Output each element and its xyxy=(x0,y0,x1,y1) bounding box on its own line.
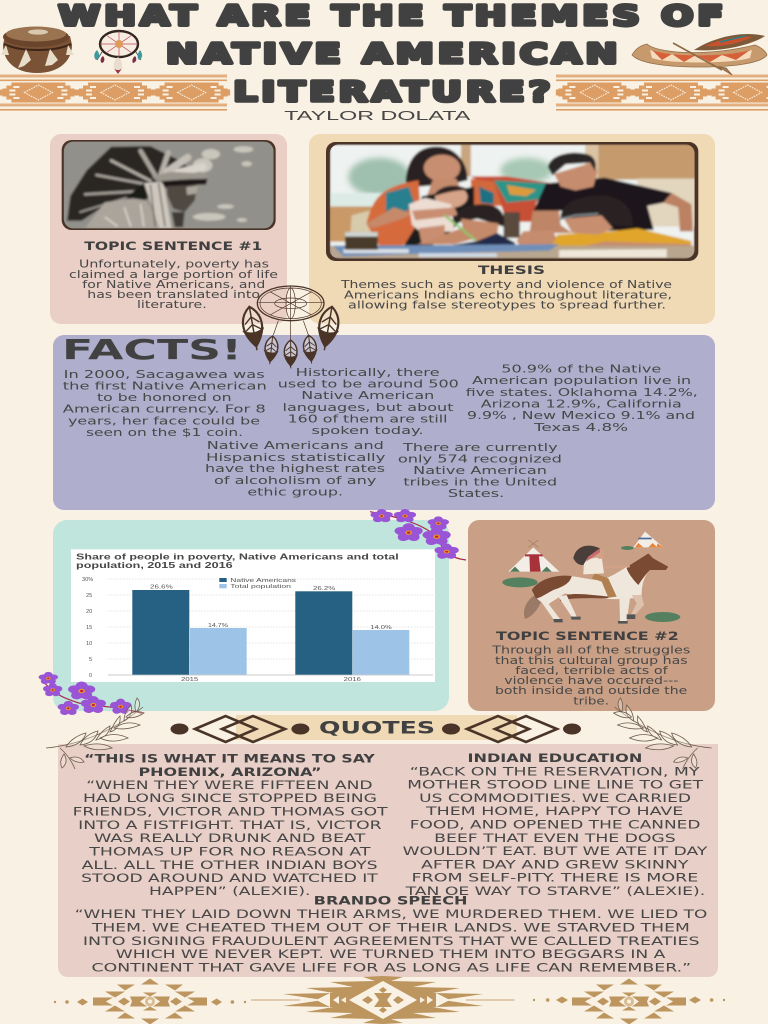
y axis labels: 20 xyxy=(86,609,92,615)
chart title: population, 2015 and 2016 xyxy=(76,560,233,570)
text block: topic sentence 2 xyxy=(491,644,691,708)
fact: Sacagawea xyxy=(63,368,267,439)
x axis labels: 2015 xyxy=(181,677,198,683)
fact: languages: used to be around 500 xyxy=(278,378,459,390)
icon: small dream catcher xyxy=(94,31,142,74)
text block: topic sentence 2: tribe. xyxy=(573,694,609,708)
fact: population by state: five states. Oklahoma 14.2%, xyxy=(466,386,698,399)
fact: alcoholism: have the highest rates xyxy=(205,462,386,475)
text block: thesis: allowing false stereotypes to spread further. xyxy=(348,298,666,312)
fact: Sacagawea: the first Native American xyxy=(63,380,267,392)
value labels: 14.7% xyxy=(208,623,228,629)
quote: Phoenix, Arizona: FRIENDS, VICTOR AND THOMAS GOT xyxy=(73,806,388,818)
chart legend: Total population xyxy=(230,584,291,590)
text block: thesis xyxy=(340,278,672,312)
fact: recognized tribes xyxy=(398,441,562,500)
quote: Phoenix, Arizona: HAPPEN” (ALEXIE). xyxy=(149,885,310,898)
quote: Phoenix, Arizona: PHOENIX, ARIZONA” xyxy=(138,766,322,779)
fact: recognized tribes: only 574 recognized xyxy=(398,452,562,466)
chart legend: Native Americans xyxy=(230,578,296,584)
fact: languages: 160 of them are still xyxy=(288,412,448,426)
panel: poverty chart xyxy=(53,520,449,711)
quote: Indian Education: INDIAN EDUCATION xyxy=(468,752,642,765)
text block: topic sentence 2: Through all of the struggles xyxy=(491,644,691,656)
fact: Sacagawea: to be honored on xyxy=(97,391,232,404)
author name: TAYLOR DOLATA xyxy=(284,109,471,123)
panel: thesis xyxy=(309,134,715,324)
value labels: 26.2% xyxy=(313,586,335,592)
quotes header banner xyxy=(170,715,581,742)
panel: facts xyxy=(53,334,715,510)
fact: alcoholism: ethic group. xyxy=(247,486,343,498)
title: NATIVE AMERICAN xyxy=(166,37,622,70)
fact: languages xyxy=(278,366,459,437)
quote: Phoenix, Arizona: WAS REALLY DRUNK AND BEAT xyxy=(94,832,366,845)
title: LITERATURE? xyxy=(233,75,554,108)
fact: population by state: Arizona 12.9%, California xyxy=(481,398,682,410)
x axis labels: 2016 xyxy=(344,677,361,683)
text block: topic sentence 1: Unfortunately, poverty has xyxy=(79,258,269,270)
icon: woven basket xyxy=(1,26,74,73)
icon: flowers top xyxy=(369,509,466,560)
text block: topic sentence 2: that this cultural group has xyxy=(495,654,688,667)
icon: leaf branch right xyxy=(614,698,712,769)
fact: recognized tribes: States. xyxy=(448,487,504,500)
quote: Indian Education: FROM SELF-PITY. THERE IS MORE xyxy=(412,872,698,884)
icon: large dream catcher xyxy=(239,286,342,368)
fact: languages: spoken today. xyxy=(312,424,424,437)
heading: quotes: QUOTES xyxy=(319,718,435,738)
y axis labels: 0 xyxy=(89,673,92,679)
image: family reading xyxy=(326,142,698,261)
text block: topic sentence 1: claimed a large portion of life xyxy=(69,268,278,281)
icon: flowers bottom-left xyxy=(37,672,142,716)
quote: Indian Education: WOULDN’T EAT. BUT WE ATE IT DAY xyxy=(403,845,708,858)
quote: Indian Education xyxy=(403,752,708,898)
value labels xyxy=(150,584,392,631)
icon: leaf branch left xyxy=(46,698,144,769)
text block: topic sentence 2: violence have occured--- xyxy=(504,674,678,687)
fact: population by state xyxy=(466,362,698,434)
y axis labels: 10 xyxy=(86,641,92,647)
quote: Phoenix, Arizona: INTO A FISTFIGHT. THAT IS, VICTOR xyxy=(78,819,382,832)
decorative pattern band: left xyxy=(0,74,230,111)
heading: topic sentence 1: TOPIC SENTENCE #1 xyxy=(84,240,263,253)
value labels: 14.0% xyxy=(370,625,392,631)
quote: Phoenix, Arizona: “WHEN THEY WERE FIFTEEN AND xyxy=(86,779,373,792)
bar chart: share of people in poverty xyxy=(71,549,435,683)
fact: population by state: 9.9% , New Mexico 9.1% and xyxy=(467,409,695,422)
fact: Sacagawea: American currency. For 8 xyxy=(63,402,266,416)
panel: quotes xyxy=(58,744,718,977)
decorative tribal pattern: bottom xyxy=(54,976,725,1024)
quote: Indian Education: MOTHER STOOD LINE LINE TO GET xyxy=(407,778,703,792)
quote: Indian Education: “BACK ON THE RESERVATION, MY xyxy=(410,766,700,778)
quote: Phoenix, Arizona: “THIS IS WHAT IT MEANS TO SAY xyxy=(84,752,376,766)
quote: Indian Education: BEEF THAT EVEN THE DOGS xyxy=(434,832,676,845)
quote: Brando speech: “WHEN THEY LAID DOWN THEIR ARMS, WE MURDERED THEM. WE LIED TO xyxy=(75,908,708,921)
x axis labels xyxy=(181,677,361,683)
quote: Phoenix, Arizona xyxy=(73,752,388,898)
quote: Indian Education: THEM HOME, HAPPY TO HAVE xyxy=(424,805,683,818)
quote: Indian Education: AFTER DAY AND GREW SKINNY xyxy=(421,858,689,872)
quote: Brando speech: CONTINENT THAT GAVE LIFE FOR AS LONG AS LIFE CAN REMEMBER.” xyxy=(92,962,691,974)
bars 2016 xyxy=(295,591,409,675)
fact: Sacagawea: seen on the $1 coin. xyxy=(86,426,243,439)
quote: Brando speech: BRANDO SPEECH xyxy=(314,894,468,908)
quote: Indian Education: US COMMODITIES. WE CARRIED xyxy=(419,792,691,805)
fact: languages: Native American xyxy=(301,389,434,402)
fact: recognized tribes: Native American xyxy=(413,464,547,477)
y axis labels xyxy=(82,577,93,679)
fact: recognized tribes: tribes in the United xyxy=(403,476,557,488)
y axis labels: 5 xyxy=(89,657,92,663)
heading: facts: FACTS! xyxy=(62,334,242,366)
quote: Phoenix, Arizona: HAD LONG SINCE STOPPED BEING xyxy=(83,792,377,805)
chart title xyxy=(76,552,399,570)
value labels: 26.6% xyxy=(150,584,173,590)
y axis labels: 25 xyxy=(86,593,92,599)
text block: thesis: Themes such as poverty and violence of Native xyxy=(340,278,672,291)
heading: thesis: THESIS xyxy=(478,264,545,277)
fact: alcoholism: Hispanics statistically xyxy=(206,451,386,464)
quote: Phoenix, Arizona: STOOD AROUND AND WATCHED IT xyxy=(81,872,378,885)
chart title: Share of people in poverty, Native Americans and total xyxy=(76,552,399,562)
icon: canoe and feather xyxy=(632,34,767,75)
fact: alcoholism xyxy=(205,439,386,498)
text block: topic sentence 2: both inside and outside the xyxy=(495,684,688,697)
text block: topic sentence 1 xyxy=(69,258,278,311)
fact: population by state: American population live in xyxy=(472,374,691,387)
illustration: rider on horse with tipis xyxy=(502,532,680,624)
quote: Indian Education: FOOD, AND OPENED THE CANNED xyxy=(410,818,700,832)
heading: topic sentence 2: TOPIC SENTENCE #2 xyxy=(496,630,679,643)
quote: Phoenix, Arizona: ALL. ALL THE OTHER INDIAN BOYS xyxy=(82,859,378,872)
quote: Brando speech: WHICH WE NEVER KEPT. WE TURNED THEM INTO BEGGARS IN A xyxy=(116,948,666,961)
y axis labels: 15 xyxy=(86,625,92,631)
panel: topic sentence 2 xyxy=(468,520,715,711)
fact: alcoholism: Native Americans and xyxy=(207,439,384,452)
fact: alcoholism: of alcoholism of any xyxy=(214,474,377,487)
fact: population by state: 50.9% of the Native xyxy=(501,362,662,376)
fact: Sacagawea: In 2000, Sacagawea was xyxy=(64,368,265,381)
y axis labels: 30% xyxy=(82,577,93,583)
text block: topic sentence 1: literature. xyxy=(137,298,207,311)
text block: topic sentence 1: for Native Americans, and xyxy=(82,278,265,291)
quote: Brando speech xyxy=(75,894,708,974)
title xyxy=(58,0,727,108)
image: chief portrait xyxy=(62,140,278,231)
fact: Sacagawea: years, her face could be xyxy=(68,414,261,428)
quote: Phoenix, Arizona: THOMAS UP FOR NO REASON AT xyxy=(88,846,371,858)
decorative pattern band: right xyxy=(556,74,768,111)
quote: Brando speech: THEM. WE CHEATED THEM OUT OF THEIR LANDS. WE STARVED THEM xyxy=(90,922,690,934)
text block: thesis: Americans Indians echo throughout literature, xyxy=(344,288,672,302)
fact: languages: Historically, there xyxy=(296,366,440,379)
fact: recognized tribes: There are currently xyxy=(402,441,559,454)
quote: Brando speech: INTO SIGNING FRAUDULENT AGREEMENTS THAT WE CALLED TREATIES xyxy=(83,935,700,948)
chart legend xyxy=(219,578,296,590)
text block: topic sentence 1: has been translated into xyxy=(87,288,261,301)
fact: languages: languages, but about xyxy=(282,401,454,414)
bars 2015 xyxy=(132,590,247,675)
quote: Indian Education: TAN OE WAY TO STARVE” (ALEXIE). xyxy=(404,885,705,898)
panel: topic sentence 1 xyxy=(50,134,287,324)
text block: topic sentence 2: faced, terrible acts of xyxy=(515,664,668,677)
fact: population by state: Texas 4.8% xyxy=(532,421,628,434)
